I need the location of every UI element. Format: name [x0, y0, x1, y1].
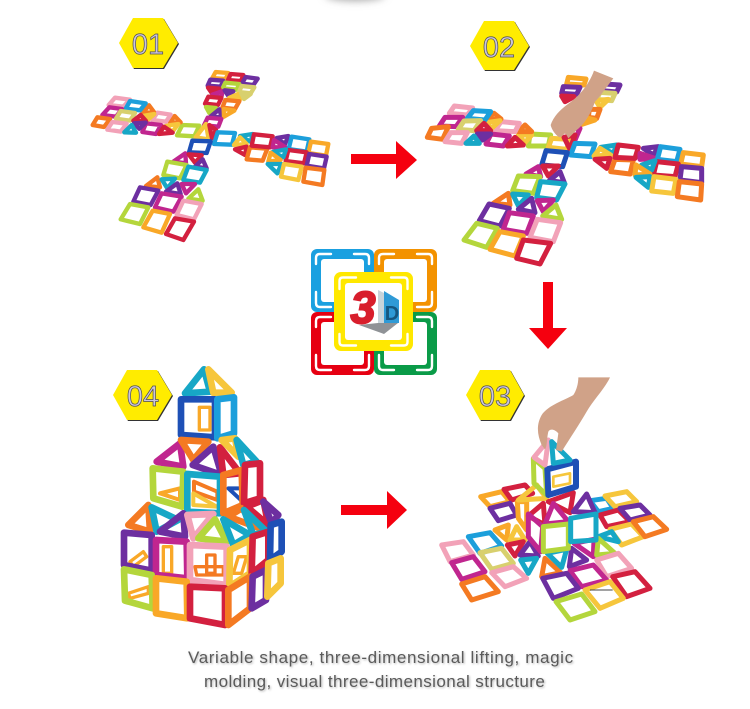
back flat tiles	[481, 485, 667, 545]
left flat tiles	[442, 525, 538, 600]
caption: Variable shape, three-dimensional lifting, magic	[188, 648, 574, 667]
red square	[311, 312, 374, 375]
step 1: flat windmill of tiles	[93, 18, 328, 240]
3D cube icon: 3	[350, 282, 376, 333]
windmill tile layout 1	[93, 72, 328, 240]
arrow: step 4 to step 3	[341, 491, 407, 529]
hand	[538, 377, 610, 452]
orange square	[374, 249, 437, 312]
center tiles	[177, 124, 235, 153]
badge 04	[113, 370, 173, 421]
left arm	[427, 106, 532, 146]
tower bottom row	[124, 558, 281, 625]
tower middle	[153, 438, 260, 513]
right arm	[234, 134, 328, 185]
badge 03: 03	[479, 381, 511, 413]
caption: molding, visual three-dimensional structure	[204, 672, 545, 691]
badge 03	[466, 370, 525, 421]
badge 02	[470, 21, 530, 71]
blue square	[311, 249, 374, 312]
center tiles	[528, 134, 595, 167]
step 4: finished tower	[113, 369, 282, 625]
tower top	[181, 369, 234, 438]
windmill tile layout 2	[427, 71, 703, 264]
arrow: step 1 to step 2	[351, 141, 417, 179]
badge 01	[119, 18, 179, 69]
tile structure	[442, 377, 667, 620]
bottom arm	[121, 153, 207, 240]
bottom arm	[464, 166, 565, 264]
left arm	[93, 98, 181, 134]
step 3: building upward	[442, 370, 667, 620]
right arm	[594, 145, 703, 200]
tower of tiles	[124, 369, 282, 625]
hand	[551, 71, 613, 138]
top arm	[562, 77, 620, 140]
yellow square	[334, 272, 413, 351]
tower lower level	[124, 500, 282, 598]
badge 02: 02	[483, 32, 515, 64]
green square	[374, 312, 437, 375]
step 2: hand lifting the windmill	[427, 21, 703, 264]
3D cube icon	[350, 282, 399, 334]
center cube lower	[517, 485, 596, 552]
upper cube	[533, 440, 576, 495]
bottom flat tiles	[542, 538, 650, 620]
badge 01: 01	[132, 29, 164, 61]
badge 04: 04	[127, 381, 159, 413]
top arm	[204, 72, 258, 127]
arrow: step 2 to step 3	[529, 282, 567, 349]
3D cube icon: D	[385, 303, 399, 325]
3D logo	[311, 249, 437, 375]
